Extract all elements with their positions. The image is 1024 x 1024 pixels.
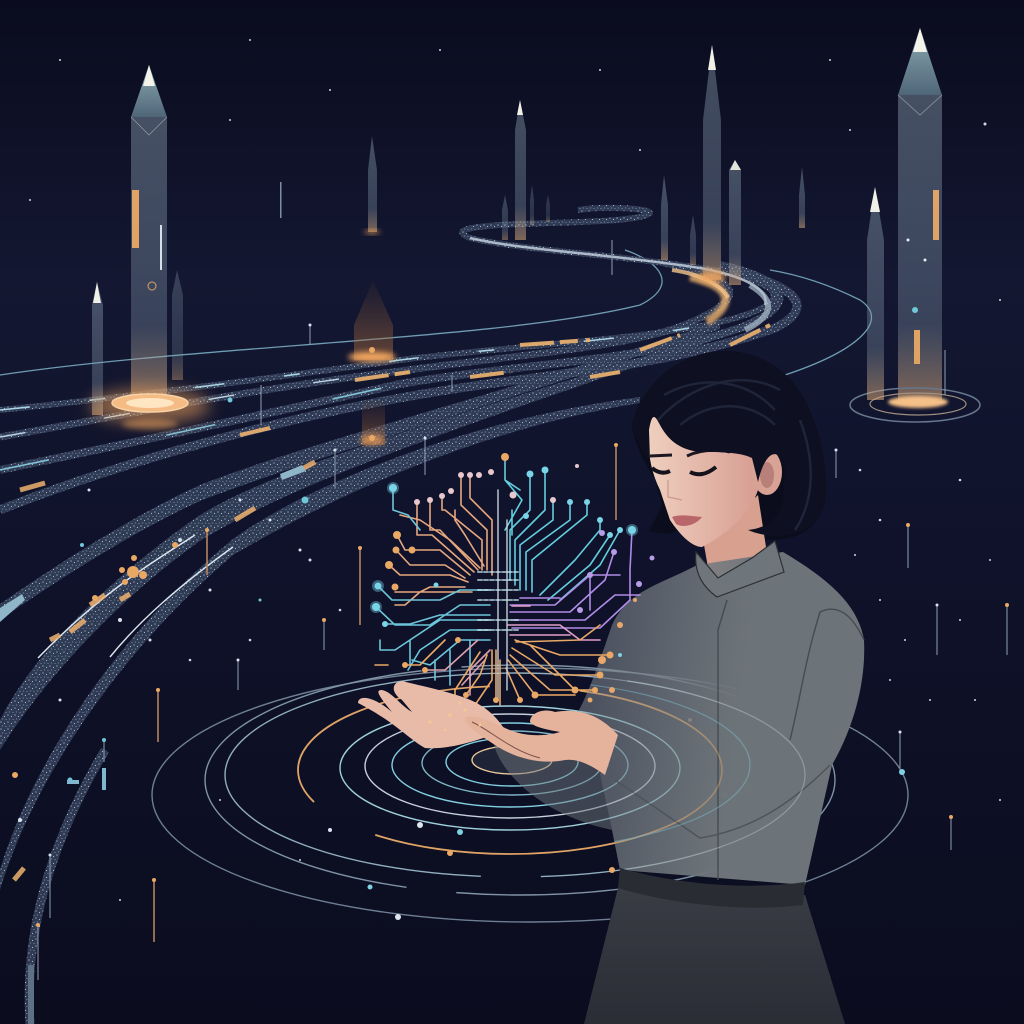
brain: lower-right orange traces bbox=[500, 625, 610, 705]
hand: viewer-left hand bbox=[358, 681, 505, 748]
brain: lower-left pink traces bbox=[425, 640, 490, 695]
brain: central chip bbox=[478, 572, 518, 630]
orbit dots bbox=[328, 718, 905, 920]
tower: big left bbox=[131, 65, 167, 395]
person: collar bbox=[696, 541, 784, 597]
tower: base glow right bbox=[850, 388, 980, 422]
person: hair back bbox=[632, 351, 826, 540]
person: skirt bbox=[584, 880, 845, 1024]
rings seen through coat bbox=[578, 676, 806, 870]
brain: lower-left orange traces bbox=[375, 640, 496, 705]
hand: palm sparkles bbox=[428, 702, 482, 731]
tower: orange ghost bbox=[348, 280, 396, 445]
data stream roads bbox=[0, 208, 871, 1024]
coat sparkle overlay bbox=[588, 598, 637, 702]
person: fringe bbox=[632, 351, 826, 536]
brain: node dots bbox=[370, 453, 654, 708]
distant stars bbox=[29, 39, 1001, 901]
road data pins and particles bbox=[0, 240, 1009, 1024]
hand: viewer-right hand bbox=[465, 710, 618, 775]
person: translucent sleeve bbox=[492, 735, 612, 830]
brain: right pink traces bbox=[508, 606, 600, 640]
person: waist belt bbox=[618, 868, 805, 908]
tower: base glow left bbox=[90, 389, 210, 429]
person: neck bbox=[704, 495, 768, 590]
brain: left cyan traces bbox=[376, 488, 490, 685]
circuit brain bbox=[375, 457, 640, 705]
brain: upper-right cyan traces bbox=[505, 457, 620, 600]
brain: spine bbox=[498, 490, 507, 700]
person: face bbox=[648, 405, 782, 547]
brain: right purple traces bbox=[510, 530, 640, 628]
tower: big right bbox=[898, 28, 942, 400]
brain: upper-left pale traces bbox=[389, 475, 492, 605]
small towers bbox=[92, 45, 884, 415]
concentric orbit rings bbox=[152, 665, 908, 922]
person: torso and coat bbox=[578, 552, 864, 885]
